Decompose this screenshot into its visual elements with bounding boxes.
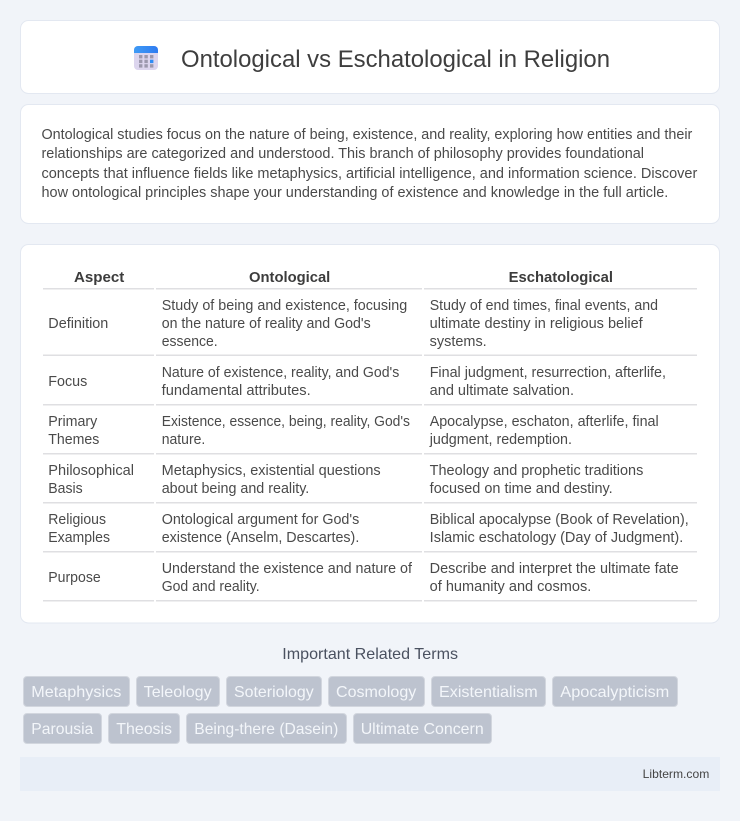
table row: Focus: fundamental attributes. <box>162 383 311 399</box>
panel: related term tags: Teleology <box>144 684 212 701</box>
panel: related term tags <box>24 676 678 744</box>
table row: Philosophical Basis: Philosophical <box>48 463 134 479</box>
table row: Purpose: of humanity and cosmos. <box>430 579 591 595</box>
table row: Philosophical Basis: about being and reality. <box>162 481 309 497</box>
panel: related term tags: Ultimate Concern <box>361 721 484 738</box>
heading: important related terms: Important Related Terms <box>282 646 458 663</box>
table header: Eschatological <box>509 270 613 286</box>
table row: Purpose: God and reality. <box>162 579 260 595</box>
table row: Religious Examples: Ontological argument for God's <box>162 512 359 528</box>
table row: Definition <box>48 298 658 350</box>
table row: Primary Themes: nature. <box>162 432 205 448</box>
text block: introduction paragraph: Ontological studies focus on the nature of being, existence, and reality, exploring how entities and their <box>42 127 692 143</box>
table row: Definition: on the nature of reality and God's <box>162 316 371 332</box>
table row: Definition: Study of being and existence, focusing <box>162 298 407 314</box>
panel: related term tags: Theosis <box>116 721 172 738</box>
panel: introduction <box>20 104 720 224</box>
table row: Religious Examples <box>48 512 689 546</box>
table row: Purpose: Purpose <box>48 570 101 586</box>
table row: Definition: Definition <box>48 316 108 332</box>
panel: related term tags: Cosmology <box>336 684 416 701</box>
table row: Purpose: Describe and interpret the ultimate fate <box>430 561 679 577</box>
icon: calendar <box>134 46 158 70</box>
table row: Primary Themes: Existence, essence, being, reality, God's <box>162 414 410 430</box>
table row: Philosophical Basis: focused on time and destiny. <box>430 481 613 497</box>
panel: header <box>20 20 720 94</box>
table row: Religious Examples: Biblical apocalypse (Book of Revelation), <box>430 512 689 528</box>
panel: related term tags: Being-there (Dasein) <box>194 721 338 738</box>
text block: introduction paragraph: concepts that influence fields like metaphysics, artificial intelligence, and information science. Discover <box>42 166 698 182</box>
table header <box>74 270 613 286</box>
table row: Definition: Study of end times, final events, and <box>430 298 658 314</box>
table row: Religious Examples: Islamic eschatology (Day of Judgment). <box>430 530 683 546</box>
table row: Philosophical Basis: Theology and prophetic traditions <box>430 463 643 479</box>
text block: introduction paragraph: how ontological principles shape your understanding of existence and knowledge in the full article. <box>42 185 668 201</box>
panel: related term tags: Existentialism <box>439 684 538 701</box>
footer: Libterm.com <box>643 767 709 781</box>
table row: Philosophical Basis: Basis <box>48 481 83 497</box>
table row: Religious Examples: existence (Anselm, Descartes). <box>162 530 359 546</box>
table row: Primary Themes: Primary <box>48 414 98 430</box>
table row: Primary Themes: Apocalypse, eschaton, afterlife, final <box>430 414 659 430</box>
table row: Focus: Final judgment, resurrection, afterlife, <box>430 365 666 381</box>
table row: Primary Themes: judgment, redemption. <box>429 432 572 448</box>
panel: related term tags: Soteriology <box>234 684 314 701</box>
table row: Purpose: Understand the existence and nature of <box>162 561 413 577</box>
table row: Definition: essence. <box>162 334 218 350</box>
table row: Religious Examples: Examples <box>48 530 110 546</box>
text block: introduction paragraph: relationships are categorized and understood. This branch of philosophy provides foundational <box>42 146 644 162</box>
title: Ontological vs Eschatological in Religion <box>181 46 610 73</box>
panel: comparison table <box>20 244 720 623</box>
table row: Definition: ultimate destiny in religious belief <box>430 316 644 332</box>
table row: Definition: systems. <box>430 334 487 350</box>
table row: Focus <box>48 365 666 399</box>
table row: Focus: and ultimate salvation. <box>430 383 574 399</box>
panel: related term tags: Apocalypticism <box>560 684 669 701</box>
table row: Focus: Nature of existence, reality, and God's <box>162 365 399 381</box>
table row: Purpose <box>48 561 679 595</box>
table row: Philosophical Basis: Metaphysics, existential questions <box>162 463 381 479</box>
table header: Ontological <box>249 270 330 286</box>
panel: related term tags: Metaphysics <box>31 684 121 701</box>
panel: related term tags: Parousia <box>31 721 93 738</box>
table row: Religious Examples: Religious <box>48 512 106 528</box>
footer <box>20 757 720 791</box>
table row: Primary Themes <box>48 414 659 448</box>
table row: Primary Themes: Themes <box>48 432 99 448</box>
text block: introduction paragraph <box>42 127 698 201</box>
table header: Aspect <box>74 270 125 286</box>
table row: Focus: Focus <box>48 374 87 390</box>
table row: Philosophical Basis <box>48 463 643 497</box>
